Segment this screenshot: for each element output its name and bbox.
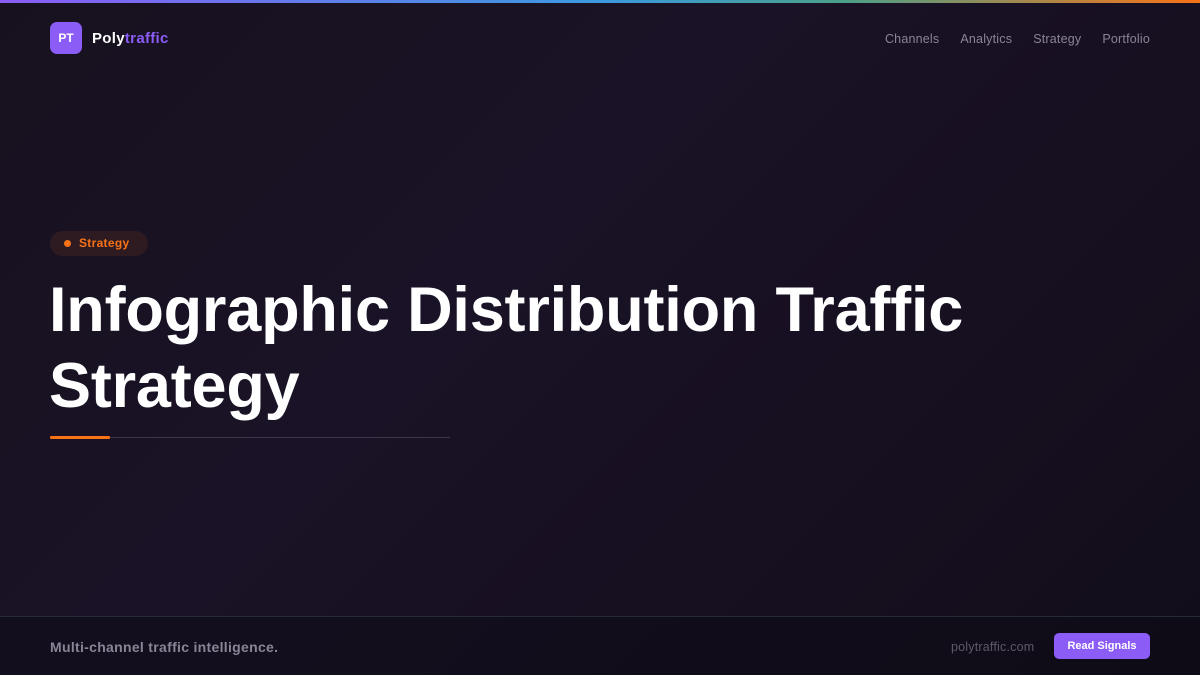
- top gradient bar: [0, 0, 1200, 3]
- tag pill: [50, 231, 148, 256]
- button: Read Signals: [1054, 633, 1150, 659]
- underline accent: [50, 436, 450, 439]
- nav: Channels: [885, 32, 939, 46]
- icon: logo badge: [50, 22, 82, 54]
- brand name: Polytraffic: [92, 30, 169, 47]
- footer tagline: Multi-channel traffic intelligence.: [50, 639, 278, 655]
- nav: Strategy: [1033, 32, 1081, 46]
- title: [49, 275, 963, 421]
- logo: [50, 22, 169, 54]
- footer url: polytraffic.com: [951, 640, 1034, 654]
- title: Infographic Distribution Traffic: [49, 275, 963, 345]
- title: Strategy: [49, 351, 300, 421]
- nav: Portfolio: [1102, 32, 1150, 46]
- nav: [885, 32, 1150, 46]
- footer: [0, 616, 1200, 675]
- tag pill: Strategy: [79, 236, 129, 250]
- nav: Analytics: [960, 32, 1012, 46]
- icon: logo badge: PT: [58, 31, 74, 45]
- button: Read Signals: Read Signals: [1067, 640, 1137, 652]
